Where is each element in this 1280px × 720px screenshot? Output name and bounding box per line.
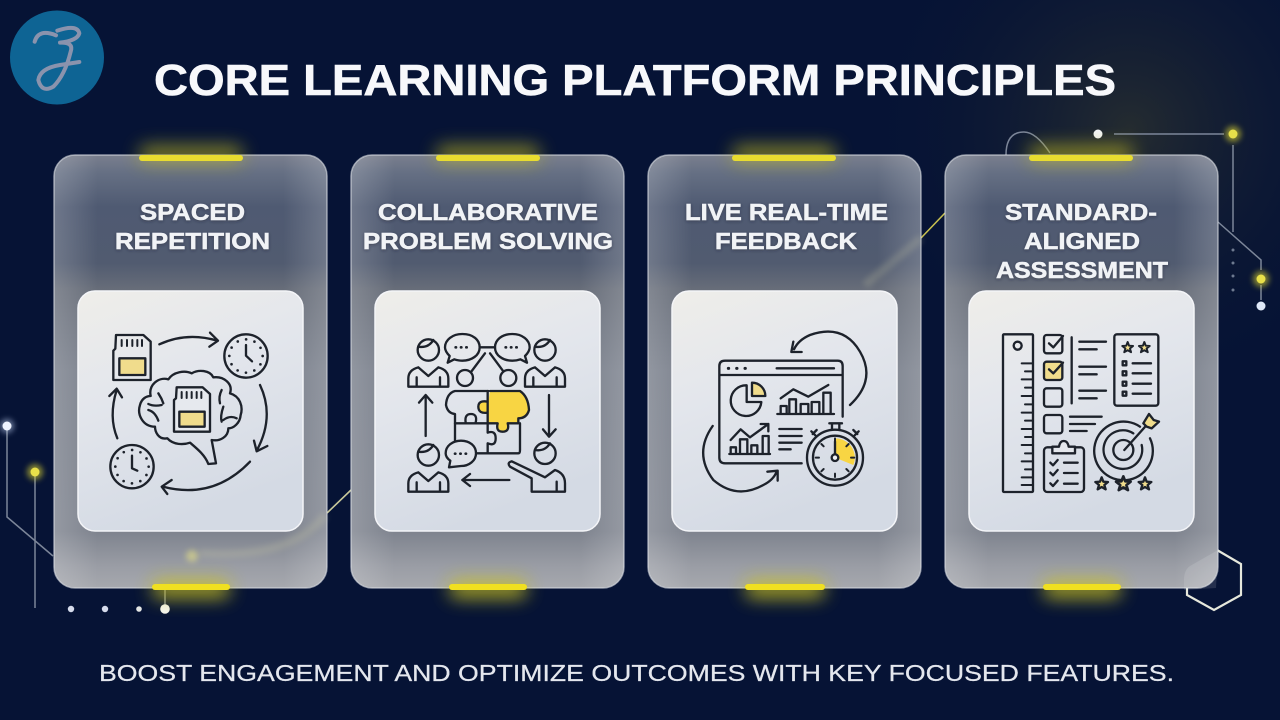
yellow puzzle piece [478, 391, 529, 432]
memory card [113, 335, 151, 380]
card 4 glow [1029, 146, 1133, 598]
card 1 inner ghost glow [186, 515, 325, 562]
hexagon decoration [1187, 550, 1241, 610]
card 2 heading [363, 199, 613, 254]
stars [1095, 476, 1151, 490]
trend chart [729, 424, 770, 454]
card 1 top accent bar [139, 155, 243, 161]
icon: dashboard with stopwatch [703, 332, 866, 491]
card 4 icon tile [969, 291, 1194, 531]
card 1 heading: REPETITION [115, 228, 270, 254]
card 4 heading: STANDARD- [1005, 199, 1157, 225]
card 2 top accent bar [436, 155, 540, 161]
feedback arrows [703, 332, 866, 491]
card 4 heading [996, 199, 1168, 283]
card 3 icon tile [672, 291, 897, 531]
panel: live real-time feedback [648, 146, 921, 598]
clipboard [1044, 441, 1084, 492]
connector line: cards 3 to 4 [921, 213, 945, 238]
rating sheet [1114, 334, 1158, 406]
logo [10, 10, 104, 104]
panel: collaborative problem solving [351, 146, 624, 598]
pie chart [731, 383, 765, 416]
card 1 icon tile [78, 291, 303, 531]
cycle arrows [109, 333, 267, 494]
card 3 heading: LIVE REAL-TIME [685, 199, 888, 225]
card 2 heading: COLLABORATIVE [378, 199, 598, 225]
card 3 bottom accent bar [745, 584, 825, 590]
person bottom left [408, 444, 448, 492]
card 2 bottom accent bar [449, 584, 527, 590]
bar chart [777, 385, 834, 414]
stopwatch [807, 423, 863, 486]
card 3 inner ghost glow [865, 238, 921, 285]
clock [110, 445, 154, 488]
card 2 icon tile [375, 291, 600, 531]
icon: spaced repetition cycle [109, 333, 268, 494]
person top right [525, 339, 565, 387]
card 2 glow [436, 146, 540, 598]
target with arrow [1094, 414, 1159, 480]
card 3 heading: FEEDBACK [715, 228, 857, 254]
person bottom right pointing [509, 443, 565, 492]
card 3 heading [685, 199, 888, 254]
card 4 hexagon ghost [1184, 550, 1218, 590]
card 1 glow [139, 146, 243, 598]
speech bubbles top [445, 334, 530, 363]
card 3 surface [648, 155, 921, 588]
card 1 heading [115, 199, 270, 254]
card 2 surface [351, 155, 624, 588]
connector line: cards 1 to 2 [327, 490, 351, 513]
puzzle outline [446, 391, 529, 453]
card 4 top accent bar [1029, 155, 1133, 161]
card 4 heading: ALIGNED [1024, 228, 1140, 254]
circuit decoration: top right [1006, 126, 1269, 310]
icon: assessment tools [1003, 334, 1159, 492]
card 4 bottom accent bar [1043, 584, 1121, 590]
card 3 top accent bar [732, 155, 836, 161]
icon: team solving puzzle [408, 334, 565, 492]
clock [224, 334, 268, 378]
text lines [779, 429, 802, 449]
network nodes [457, 347, 516, 386]
card 1 surface [54, 155, 327, 588]
checklist [1044, 335, 1106, 433]
card 4 surface [945, 155, 1218, 588]
flow arrows [419, 395, 556, 486]
brain [139, 371, 242, 464]
card 2 heading: PROBLEM SOLVING [363, 228, 613, 254]
card 1 heading: SPACED [140, 199, 245, 225]
panel: standard-aligned assessment [945, 146, 1218, 598]
speech bubble bottom [446, 441, 476, 467]
panel: spaced repetition [54, 146, 327, 598]
card 3 glow [732, 146, 836, 598]
person top left [408, 339, 448, 387]
ruler [1003, 334, 1033, 492]
footer tagline: BOOST ENGAGEMENT AND OPTIMIZE OUTCOMES WITH KEY FOCUSED FEATURES. [99, 660, 1174, 686]
card 1 bottom accent bar [152, 584, 230, 590]
card 4 heading: ASSESSMENT [996, 257, 1168, 283]
circuit decoration: left [0, 419, 170, 614]
dashboard window [719, 361, 843, 463]
title: CORE LEARNING PLATFORM PRINCIPLES [154, 56, 1116, 105]
